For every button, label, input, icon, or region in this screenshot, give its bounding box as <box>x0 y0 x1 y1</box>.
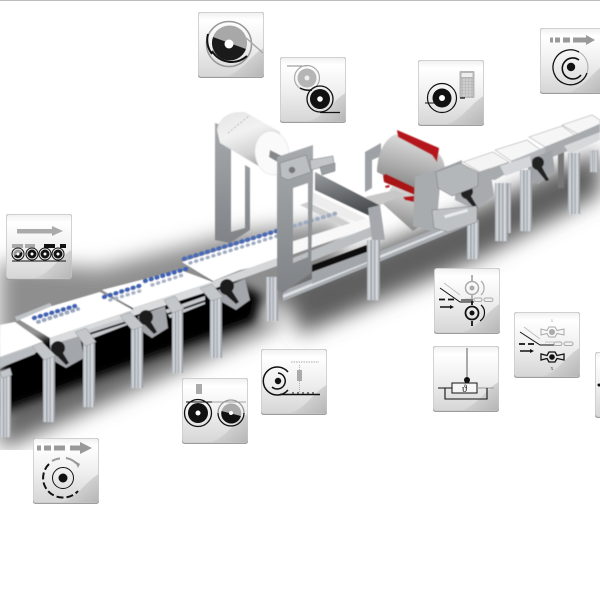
sheet on rollers <box>300 190 405 230</box>
lower winding roll <box>383 186 436 231</box>
icon: gap rollers horizontal: x <box>550 366 554 372</box>
icon: unwinding roll <box>198 12 264 78</box>
right front plate and blocks <box>413 160 478 232</box>
icon: arrow with spiral roll <box>540 28 600 94</box>
shadow under conveyor <box>0 150 600 450</box>
upper winding roll with red strips <box>377 130 445 212</box>
machine <box>0 112 600 450</box>
icon: roll with calculator <box>418 60 484 126</box>
left legs <box>0 298 222 437</box>
rear unwinder frame <box>215 123 381 243</box>
leg brackets left <box>0 284 223 378</box>
icon: gap rollers horizontal <box>514 312 580 378</box>
left conveyor modules <box>0 232 277 368</box>
icon: two rollers transfer <box>280 57 346 123</box>
icon: dashed arrow with rotating roll <box>33 438 99 504</box>
big unwinding roll <box>217 112 292 177</box>
icon: partial tile at right edge <box>595 352 600 418</box>
tower clamp block <box>280 155 335 180</box>
product dots on belts <box>34 213 337 322</box>
drive pulleys right <box>461 157 549 209</box>
central support legs <box>266 220 479 321</box>
icon: two rollers with gauge <box>182 378 248 444</box>
icon: gap rollers vertical <box>434 268 500 334</box>
drive pulleys and belts left <box>51 279 239 365</box>
icon: temperature sensor <box>433 346 499 412</box>
front tower frame <box>277 145 313 293</box>
middle conveyor belt section <box>243 218 373 284</box>
rear legs right <box>505 150 598 233</box>
icon: four rollers with arrow <box>6 214 72 280</box>
right legs <box>495 153 580 241</box>
icon: gap rollers horizontal: x <box>551 319 554 324</box>
middle column <box>368 205 385 240</box>
icon: roll with rack sensor <box>261 349 327 415</box>
lower beam <box>283 212 477 301</box>
right conveyor modules <box>455 115 600 210</box>
icon: temperature sensor: ϑ <box>462 384 467 395</box>
diagonal tube <box>315 172 379 217</box>
